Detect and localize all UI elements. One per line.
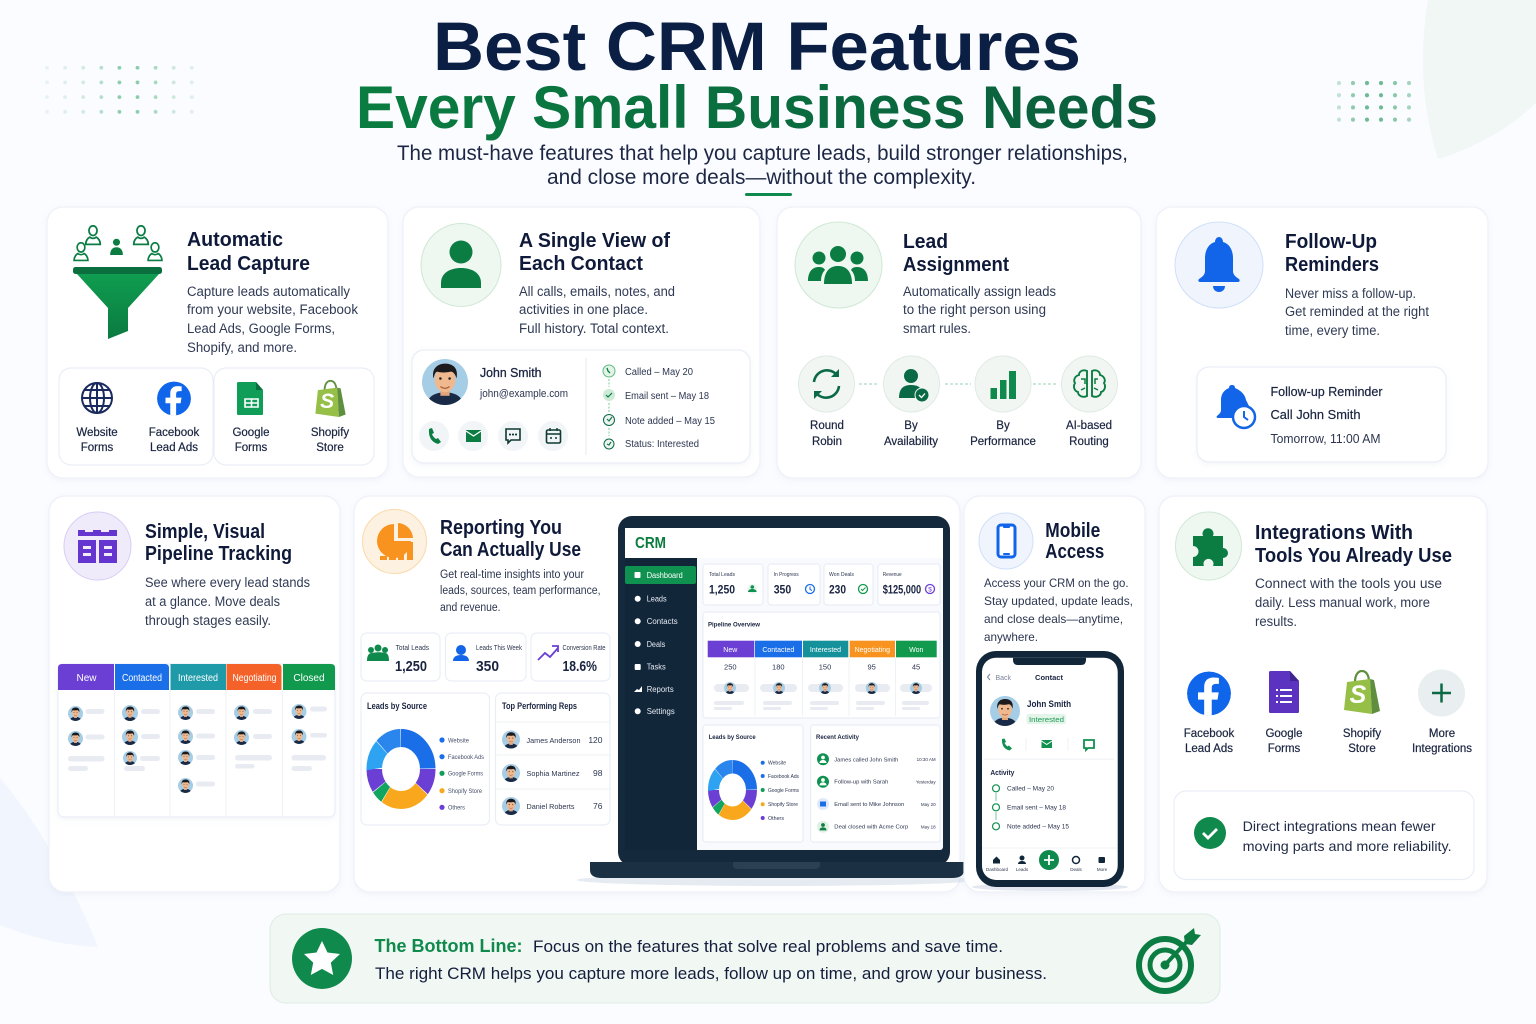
contact card — [412, 350, 750, 463]
heading: Tools You Already Use — [1255, 545, 1452, 567]
divider — [585, 358, 587, 455]
source labels — [76, 427, 349, 454]
icon: star — [292, 928, 352, 989]
icon: team — [795, 222, 882, 308]
pipeline overview: Negotiating — [855, 647, 890, 654]
integration labels: Facebook — [1184, 728, 1234, 740]
dashboard stats: 1,250 — [709, 584, 735, 596]
background blob: bottom left — [0, 778, 98, 947]
dashboard recent activity: May 20 — [921, 802, 936, 807]
chart: leads by source donut: Others — [448, 804, 466, 812]
body text: Connect with the tools you use — [1255, 576, 1442, 591]
column header: new — [58, 664, 114, 690]
title line 1: Best CRM Features — [433, 8, 1081, 85]
body text: Get real-time insights into your — [440, 569, 584, 581]
phone bottom nav: Dashboard — [986, 867, 1009, 872]
pipeline overview: 45 — [912, 663, 920, 672]
activity timeline: Status: Interested — [625, 439, 699, 450]
body text: results. — [1255, 614, 1297, 629]
heading — [1285, 231, 1379, 276]
banner: the bottom line — [270, 914, 1220, 1003]
heading: Simple, Visual — [145, 521, 265, 543]
dashboard leads by source: Google Forms — [768, 788, 799, 794]
title line 2: Every Small Business Needs — [356, 74, 1158, 141]
subtitle: The must-have features that help you capture leads, build stronger relationships, — [397, 141, 1128, 165]
panel: follow-up reminders — [1156, 207, 1488, 478]
dot pattern: top left — [45, 66, 208, 118]
integration labels: Lead Ads — [1185, 743, 1233, 755]
phone activity — [990, 770, 1069, 830]
email: john@example.com — [479, 388, 568, 400]
heading: Reporting You — [440, 517, 562, 539]
icon: shopify — [315, 381, 346, 417]
body text — [145, 575, 310, 628]
panel: reporting — [354, 496, 977, 892]
lead avatars and placeholder bars — [68, 704, 327, 793]
title — [356, 8, 1158, 141]
icon: check — [1194, 817, 1226, 849]
list: top performing reps: 76 — [593, 801, 603, 811]
bottom line text — [374, 936, 1047, 983]
phone header: Contact — [1035, 673, 1063, 682]
name: John Smith — [480, 365, 542, 380]
option labels: Robin — [812, 436, 842, 448]
dashboard recent activity: James called John Smith — [834, 757, 898, 763]
heading — [1045, 520, 1104, 563]
dashboard stats: 350 — [774, 584, 791, 596]
pipeline overview: Won — [909, 647, 924, 654]
icon: by availability — [884, 356, 940, 412]
body text — [903, 284, 1056, 336]
icon: person — [421, 224, 501, 306]
list: top performing reps: Sophia Martinez — [526, 769, 580, 778]
body text — [519, 284, 675, 336]
phone activity: Activity — [990, 770, 1014, 777]
pipeline overview: 95 — [868, 663, 876, 672]
dashboard leads by source: Leads by Source — [709, 734, 756, 741]
body text: activities in one place. — [519, 302, 648, 317]
dashboard leads by source: Website — [768, 760, 786, 766]
heading — [1255, 522, 1452, 567]
body text — [1255, 576, 1442, 629]
dashboard stats: In Progress — [774, 572, 799, 578]
source labels: Facebook — [149, 427, 199, 439]
body text: to the right person using — [903, 302, 1046, 317]
icon: google forms — [1269, 671, 1299, 713]
avatar — [422, 359, 468, 405]
icon: globe — [82, 383, 112, 413]
dashboard recent activity: Yesterday — [916, 780, 936, 784]
column header: interested: Interested — [178, 673, 218, 684]
reminder text: Call John Smith — [1270, 408, 1361, 422]
column header: new: New — [76, 673, 97, 684]
body text: See where every lead stands — [145, 575, 310, 590]
integration labels: Forms — [1268, 743, 1301, 755]
stat: leads this week: 350 — [476, 658, 499, 675]
body text: Get reminded at the right — [1285, 304, 1429, 319]
heading — [519, 230, 670, 275]
icon: shopify — [1344, 671, 1380, 714]
integration labels: Shopify — [1343, 728, 1381, 740]
dashboard recent activity: Deal closed with Acme Corp — [834, 825, 908, 831]
integration labels: More — [1429, 728, 1455, 740]
activity timeline: Note added – May 15 — [625, 416, 715, 427]
heading: Mobile — [1045, 520, 1100, 542]
reminder text: Tomorrow, 11:00 AM — [1270, 432, 1380, 446]
chart: leads by source donut: Website — [448, 738, 469, 744]
dashboard stats — [703, 564, 940, 605]
bottom line text: The Bottom Line: — [374, 936, 522, 956]
icon: funnel with leads — [73, 226, 162, 339]
source labels: Shopify — [311, 427, 349, 439]
list: top performing reps: 120 — [588, 735, 603, 745]
subtitle: and close more deals—without the complexity. — [547, 165, 976, 189]
dashboard recent activity: Email sent to Mike Johnson — [834, 802, 904, 808]
source labels: Store — [316, 442, 344, 454]
pipeline board — [58, 664, 335, 817]
activity timeline: Called – May 20 — [625, 367, 693, 378]
icon: smartphone — [979, 513, 1033, 569]
body text: time, every time. — [1285, 323, 1380, 338]
callout text: moving parts and more reliability. — [1243, 838, 1452, 854]
icon: bell — [1175, 222, 1263, 308]
dashboard recent activity — [811, 725, 940, 842]
phone contact name — [1026, 699, 1071, 724]
dashboard recent activity: May 18 — [921, 824, 936, 830]
icon: puzzle piece — [1176, 512, 1242, 580]
icon: facebook — [157, 382, 191, 416]
panel: integrations — [1159, 496, 1487, 892]
pipeline overview: New — [723, 647, 738, 654]
body text: through stages easily. — [145, 613, 271, 628]
phone bottom nav: Leads — [1016, 867, 1029, 872]
action icons — [419, 421, 568, 451]
option labels — [810, 420, 1112, 448]
reminder text — [1270, 385, 1382, 446]
heading — [440, 517, 581, 561]
dashboard stats: Total Leads — [709, 572, 735, 578]
phone bottom nav — [982, 848, 1117, 872]
pipeline overview: Pipeline Overview — [708, 622, 761, 629]
heading — [187, 229, 310, 275]
dashboard stats: $125,000 — [883, 584, 921, 596]
heading: Lead Capture — [187, 253, 310, 275]
heading: Lead — [903, 231, 948, 253]
pipeline overview: Contacted — [762, 647, 794, 654]
laptop dashboard — [577, 516, 977, 886]
integration labels: Google — [1265, 728, 1303, 740]
source labels: Forms — [235, 442, 268, 454]
phone actions — [984, 738, 1114, 759]
list: top performing reps: Daniel Roberts — [526, 802, 575, 811]
stat: total leads: 1,250 — [395, 658, 427, 675]
screen — [625, 528, 943, 850]
body text: smart rules. — [903, 321, 971, 336]
list: top performing reps: Top Performing Reps — [502, 701, 577, 711]
heading — [903, 231, 1009, 276]
column header: negotiating: Negotiating — [232, 673, 276, 684]
icon: more integrations — [1418, 670, 1465, 716]
bottom line text: Focus on the features that solve real problems and save time. — [533, 937, 1003, 956]
panel: single view of contact — [403, 207, 760, 477]
icon: target — [1139, 928, 1201, 991]
icon: facebook — [1187, 672, 1231, 717]
column header: contacted — [115, 664, 169, 690]
dashboard leads by source: Facebook Ads — [768, 774, 799, 780]
panel: mobile access — [964, 496, 1145, 892]
stat: leads this week — [446, 633, 526, 681]
body text: and close deals—anytime, — [984, 612, 1123, 626]
activity timeline — [603, 365, 715, 450]
column header: interested — [170, 664, 226, 690]
icon: report chart — [362, 510, 426, 574]
chart: leads by source donut: Google Forms — [448, 770, 484, 778]
activity timeline: Email sent – May 18 — [625, 391, 709, 402]
icon: google sheets — [237, 382, 263, 415]
panel: lead assignment — [777, 207, 1141, 478]
column header: negotiating — [226, 664, 282, 690]
reminder text: Follow-up Reminder — [1270, 385, 1382, 399]
callout text — [1243, 818, 1452, 854]
body text — [984, 576, 1133, 644]
laptop base — [590, 862, 964, 878]
pipeline overview — [703, 612, 940, 718]
option labels: Performance — [970, 436, 1036, 448]
body text — [187, 284, 358, 355]
phone activity: Email sent – May 18 — [1007, 804, 1066, 812]
heading: A Single View of — [519, 230, 670, 252]
connectors — [859, 383, 1058, 385]
body text: Shopify, and more. — [187, 340, 297, 355]
pipeline overview: Interested — [810, 647, 841, 654]
heading: Reminders — [1285, 254, 1379, 276]
dashboard recent activity: Follow-up with Sarah — [834, 780, 888, 786]
list: top performing reps: 98 — [593, 768, 603, 778]
body text: leads, sources, team performance, — [440, 585, 600, 597]
body text: Lead Ads, Google Forms, — [187, 321, 335, 336]
heading: Automatic — [187, 229, 283, 251]
phone header — [988, 673, 1063, 682]
callout: direct integrations — [1174, 791, 1474, 880]
dashboard stats: $ — [928, 586, 932, 594]
sidebar: Tasks — [647, 662, 666, 672]
sidebar: Contacts — [647, 617, 678, 626]
sidebar: Deals — [647, 640, 665, 649]
integration labels: Integrations — [1412, 743, 1472, 755]
phone bottom nav: More — [1097, 867, 1108, 872]
option labels: By — [904, 420, 918, 432]
panel: automatic lead capture — [47, 207, 388, 478]
stat: leads this week: Leads This Week — [476, 643, 522, 652]
body text — [1285, 286, 1429, 338]
phone contact name: John Smith — [1027, 699, 1071, 709]
body text: Automatically assign leads — [903, 284, 1056, 299]
icon: bell with clock — [1217, 385, 1255, 428]
pipeline overview: 250 — [724, 663, 737, 672]
body text: Stay updated, update leads, — [984, 594, 1133, 608]
background blob: top right — [1423, 0, 1536, 159]
dashboard leads by source — [703, 725, 803, 842]
sidebar: Settings — [647, 707, 675, 716]
subtitle — [397, 141, 1128, 189]
phone avatar — [990, 696, 1020, 726]
icon: round robin — [798, 356, 854, 412]
dashboard leads by source: Others — [768, 816, 785, 822]
chart: leads by source donut — [361, 693, 490, 825]
body text: anywhere. — [984, 630, 1038, 644]
stat: conversion rate: 18.6% — [562, 658, 597, 675]
heading: Can Actually Use — [440, 539, 581, 561]
icon: by performance — [975, 356, 1031, 412]
stat: total leads — [361, 633, 440, 681]
sidebar: Leads — [647, 594, 667, 604]
board columns — [114, 690, 282, 816]
dashboard stats: 230 — [829, 584, 846, 596]
body text: daily. Less manual work, more — [1255, 595, 1430, 610]
heading: Follow-Up — [1285, 231, 1377, 253]
body text: Never miss a follow-up. — [1285, 286, 1416, 301]
dashboard recent activity: 10:30 AM — [917, 757, 936, 762]
bottom line text: The right CRM helps you capture more leads, follow up on time, and grow your business. — [375, 964, 1047, 983]
stat: conversion rate — [531, 633, 610, 681]
dashboard stats: Revenue — [883, 572, 902, 578]
source labels: Google — [232, 427, 270, 439]
integration labels: Store — [1348, 743, 1376, 755]
phone header: Back — [996, 675, 1012, 682]
title underline — [745, 193, 792, 196]
source labels: Forms — [81, 442, 114, 454]
dashboard leads by source: Shopify Store — [768, 802, 798, 808]
stat: total leads: Total Leads — [396, 643, 429, 652]
option labels: By — [996, 420, 1010, 432]
body text: at a glance. Move deals — [145, 594, 280, 609]
sources box right — [214, 368, 374, 465]
option labels: Routing — [1069, 436, 1109, 448]
heading: Each Contact — [519, 253, 643, 275]
dashboard stats: Won Deals — [829, 572, 854, 578]
body text — [440, 569, 600, 614]
sidebar — [625, 558, 697, 850]
phone activity: Note added – May 15 — [1007, 824, 1069, 830]
pipeline overview: 180 — [772, 663, 785, 672]
source labels: Lead Ads — [150, 442, 198, 454]
list: top performing reps — [496, 693, 610, 825]
column header: closed — [283, 664, 335, 690]
sources box left — [59, 368, 213, 465]
body text: Access your CRM on the go. — [984, 576, 1128, 590]
phone activity: Called – May 20 — [1007, 786, 1054, 792]
heading: Pipeline Tracking — [145, 543, 292, 565]
source labels: Website — [76, 427, 118, 439]
option labels: Round — [810, 420, 844, 432]
chart: leads by source donut: Facebook Ads — [448, 754, 485, 761]
icon: AI routing — [1062, 356, 1118, 412]
callout text: Direct integrations mean fewer — [1243, 818, 1436, 834]
icon: pipeline board — [64, 512, 131, 580]
integration labels — [1184, 728, 1472, 755]
panel: visual pipeline tracking — [49, 496, 340, 892]
option labels: Availability — [884, 436, 938, 448]
heading — [145, 521, 292, 565]
phone mockup — [972, 651, 1128, 891]
heading: Integrations With — [1255, 522, 1413, 544]
phone contact name: Interested — [1029, 715, 1064, 724]
dashboard recent activity: Recent Activity — [816, 734, 859, 741]
body text: All calls, emails, notes, and — [519, 284, 675, 299]
body text: from your website, Facebook — [187, 302, 358, 317]
phone bottom nav: Deals — [1070, 867, 1082, 872]
pipeline overview: 150 — [819, 663, 831, 672]
heading: Assignment — [903, 254, 1009, 276]
sidebar: Reports — [647, 685, 674, 694]
body text: and revenue. — [440, 602, 500, 614]
CRM logo: CRM — [635, 535, 666, 552]
chart: leads by source donut: Leads by Source — [367, 701, 427, 711]
column header: contacted: Contacted — [122, 673, 162, 684]
body text: Full history. Total context. — [519, 321, 669, 336]
stat: conversion rate: Conversion Rate — [562, 643, 606, 652]
list: top performing reps: James Anderson — [526, 736, 580, 745]
body text: Capture leads automatically — [187, 284, 350, 299]
reminder card — [1197, 367, 1446, 462]
sidebar: Dashboard — [647, 571, 683, 580]
option labels: AI-based — [1066, 420, 1112, 432]
chart: leads by source donut: Shopify Store — [448, 788, 482, 795]
heading: Access — [1045, 541, 1104, 563]
column header: closed: Closed — [293, 673, 325, 684]
dot pattern: top right — [1337, 81, 1421, 124]
